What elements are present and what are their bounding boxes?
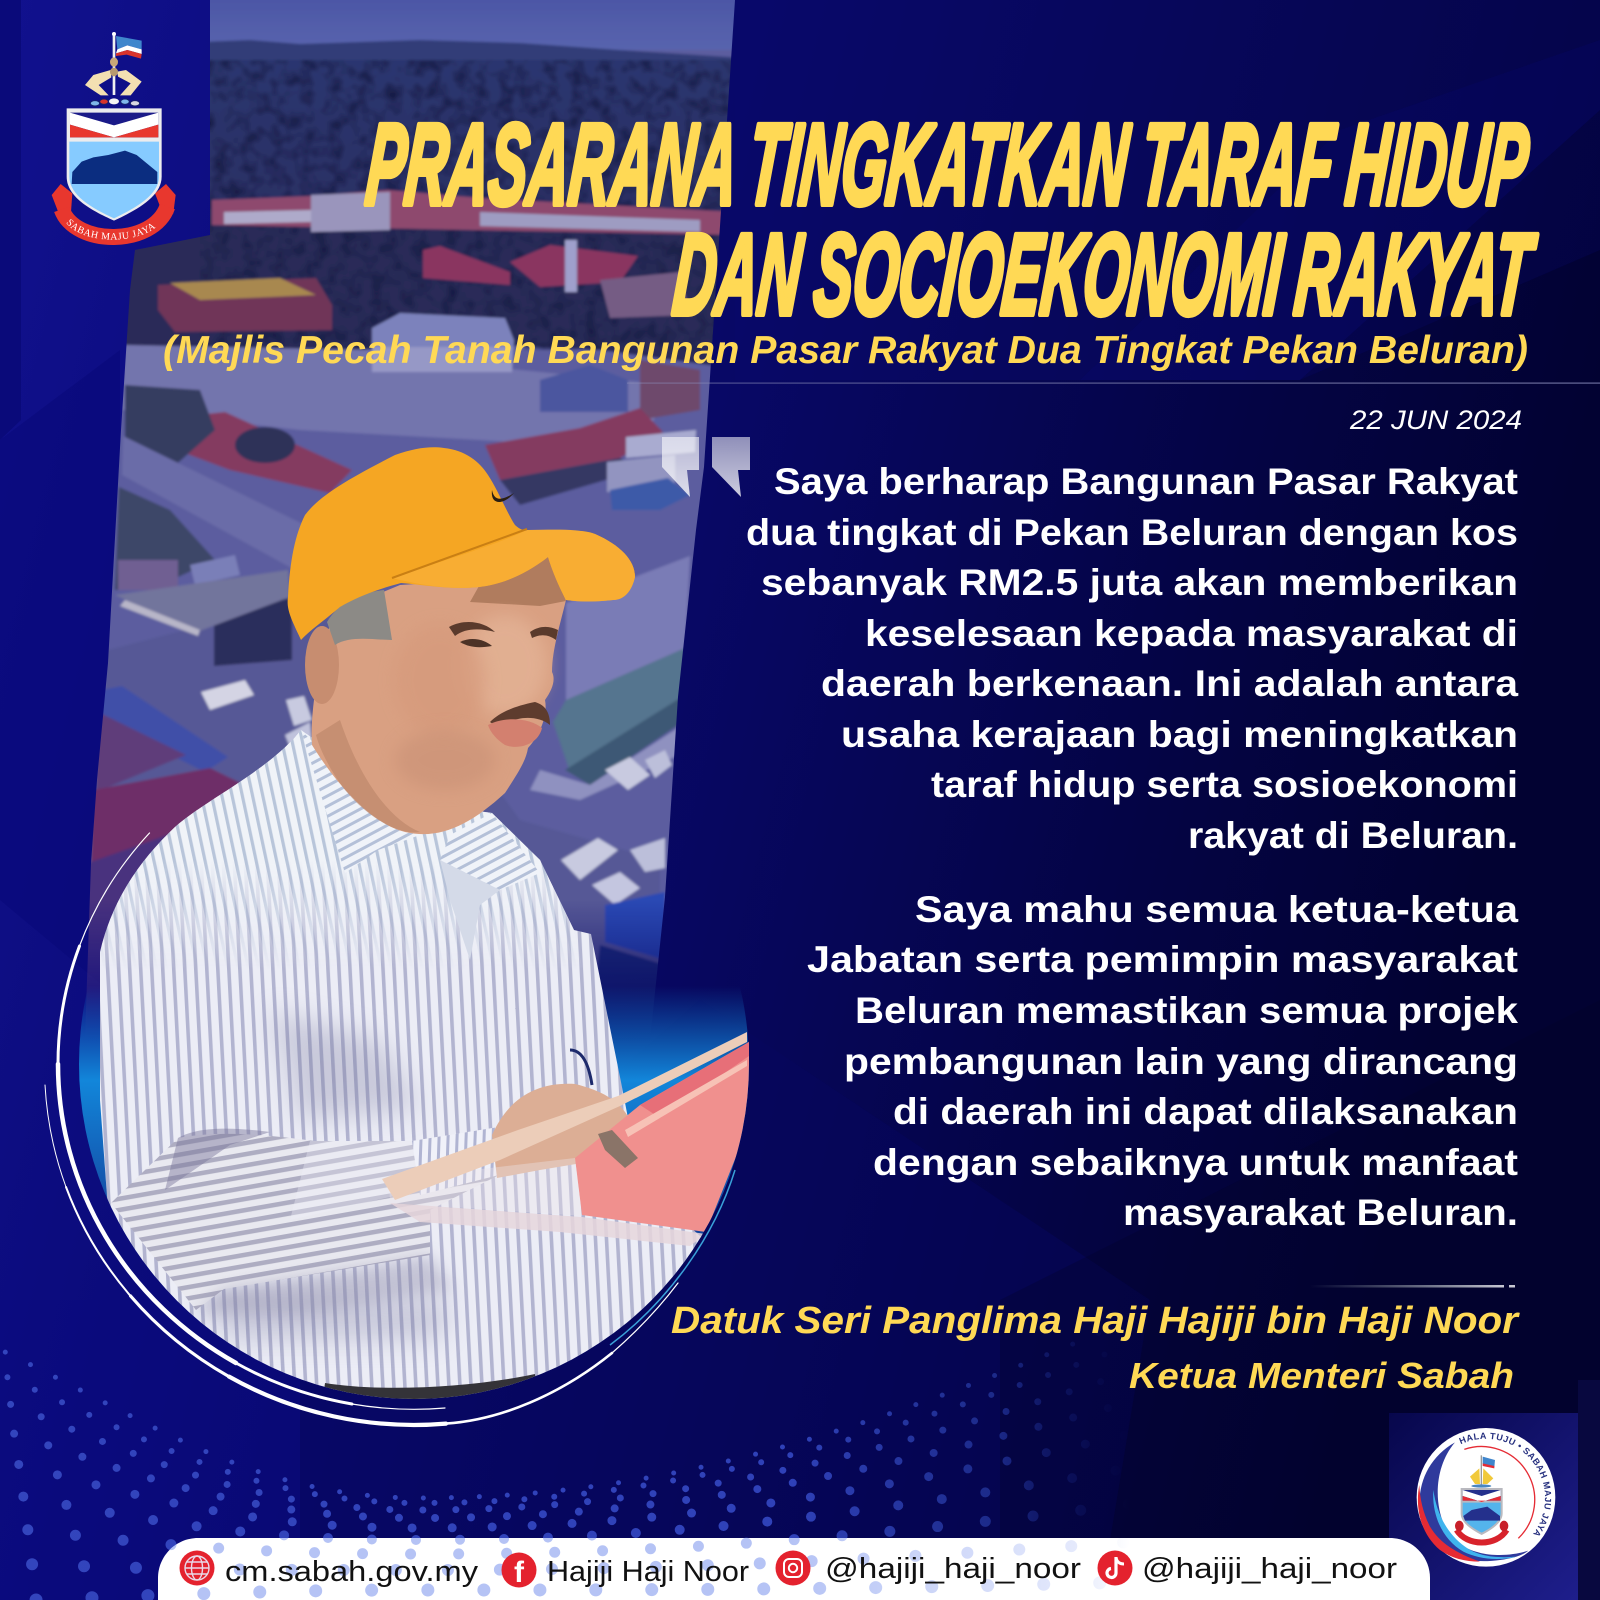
tiktok link: @hajiji_haji_noor [1142,1553,1397,1585]
halftone dot wave [0,1320,1130,1600]
quote mark [662,437,750,497]
facebook link: f [514,1556,525,1589]
moustache [490,702,550,725]
lectern bracket [598,1130,638,1168]
facebook link: Hajiji Haji Noor [547,1556,749,1588]
icon: Hala Tuju Sabah Maju Jaya badge: HALA TUJU • SABAH MAJU JAYA [1459,1432,1552,1536]
divider line [627,382,1600,384]
quote paragraph 1 [746,461,1518,856]
instagram link [776,1550,1081,1586]
attribution title: Ketua Menteri Sabah [1129,1355,1514,1396]
tiktok link [1098,1550,1397,1586]
quote paragraph 1: sebanyak RM2.5 juta akan memberikan [761,562,1518,603]
blue and red roofs bottom left [100,686,228,772]
blue roof and dark ground [605,892,665,960]
petrol station [214,598,292,666]
orange roof hall [158,278,332,332]
quote paragraph 2: dengan sebaiknya untuk manfaat [873,1142,1518,1183]
quote paragraph 2: Saya mahu semua ketua-ketua [915,889,1518,930]
quote paragraph 2: masyarakat Beluran. [1123,1192,1518,1233]
collar [301,730,420,873]
cars [201,680,254,710]
quote paragraph 1: rakyat di Beluran. [1188,815,1518,856]
distant school buildings [212,190,735,235]
website link: cm.sabah.gov.my [225,1556,479,1588]
website link [180,1550,479,1588]
subtitle: (Majlis Pecah Tanah Bangunan Pasar Rakyat Dua Tingkat Pekan Beluran) [163,329,1528,372]
trousers belt [320,1374,540,1420]
attribution name: Datuk Seri Panglima Haji Hajiji bin Haji Noor [671,1300,1520,1342]
sky [200,0,750,50]
logo panel backdrop [1389,1380,1600,1600]
shirt shading [200,1010,450,1340]
quote paragraph 2: Beluran memastikan semua projek [855,990,1518,1031]
forearm sleeve [111,1127,499,1310]
quote paragraph 1: usaha kerajaan bagi meningkatkan [841,714,1518,755]
date: 22 JUN 2024 [1349,405,1522,435]
grey-blue hall [370,311,516,358]
title [362,101,1540,339]
low red roofs left with palms [188,411,352,494]
road [122,436,305,570]
quote paragraph 2: di daerah ini dapat dilaksanakan [893,1091,1518,1132]
facebook link [502,1552,749,1589]
icon: Hala Tuju Sabah Maju Jaya badge [1416,1428,1556,1567]
quote paragraph 2 [807,889,1518,1233]
footer bar with social links [0,1320,1430,1600]
pen in pocket [570,1050,592,1085]
ground between [108,620,658,913]
signature rule [1310,1285,1515,1288]
icon: Sabah state crest [52,32,176,245]
quote paragraph 1: daerah berkenaan. Ini adalah antara [821,663,1518,704]
panel: aerial photo of Beluran town [86,0,735,1012]
hand [492,1084,630,1178]
portrait: chief minister at lectern [100,447,760,1420]
circle backdrop [79,729,749,1399]
lips [488,719,542,747]
mosque and red roofs [423,246,510,285]
neck and face [312,575,566,834]
quote paragraph 1: dua tingkat di Pekan Beluran dengan kos [746,512,1518,553]
big grey roof and green building right [566,556,690,704]
plaza ground [122,345,670,450]
quote paragraph 1: Saya berharap Bangunan Pasar Rakyat [774,461,1518,502]
quote paragraph 1: keselesaan kepada masyarakat di [865,613,1518,654]
icon: Sabah state crest: SABAH MAJU JAYA [66,219,156,240]
lectern [575,1042,749,1232]
cap logo [492,490,514,502]
quote paragraph 1: taraf hidup serta sosioekonomi [931,764,1518,805]
quote paragraph 2: pembangunan lain yang dirancang [844,1041,1518,1082]
instagram link: @hajiji_haji_noor [825,1553,1081,1585]
baseball cap [288,447,635,640]
eyes and brows [449,622,495,636]
decorative swoosh arcs around portrait [45,833,678,1425]
low red roofs right [485,408,663,480]
shirt [100,730,702,1399]
quote paragraph 2: Jabatan serta pemimpin masyarakat [807,939,1518,980]
hair [327,590,392,645]
